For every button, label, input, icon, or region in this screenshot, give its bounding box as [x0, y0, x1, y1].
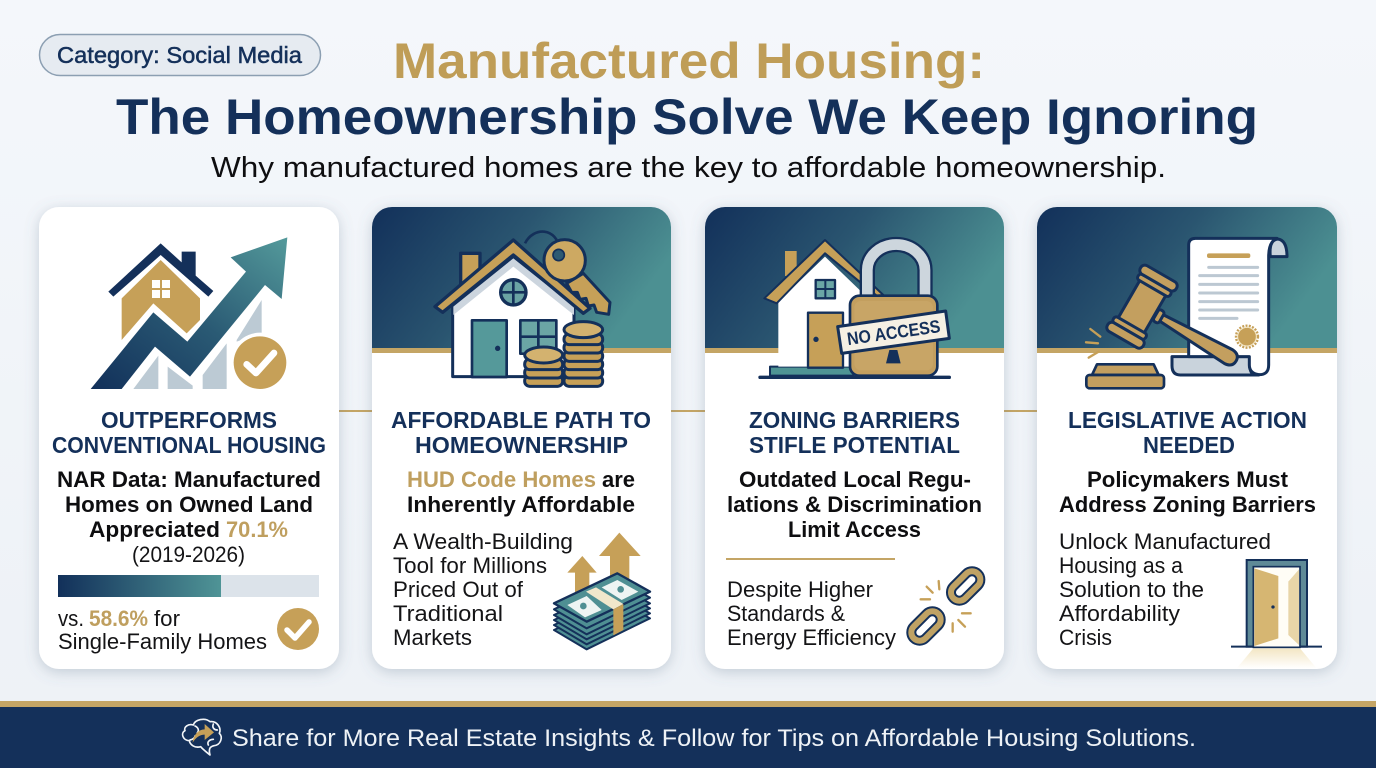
heading [749, 407, 960, 458]
subheading: are [602, 467, 635, 492]
heading: STIFLE POTENTIAL [749, 432, 960, 458]
body text: Traditional [393, 601, 503, 626]
panel: zoning barriers [705, 207, 1004, 669]
icon: broken chain [908, 568, 984, 644]
heading: LEGISLATIVE ACTION [1068, 407, 1307, 433]
panel: affordable path [372, 207, 671, 669]
body text: Solution to the [1059, 577, 1204, 602]
icon: house with key and coins [435, 232, 610, 386]
subheading: Outdated Local Regu- [739, 467, 971, 492]
comparison text: vs. [58, 606, 84, 631]
heading [1068, 407, 1307, 458]
icon: house with padlock and no access sign [760, 240, 949, 377]
icon: house with padlock and no access sign: NO ACCESS [846, 316, 942, 349]
heading: OUTPERFORMS [101, 407, 277, 433]
heading: NEEDED [1143, 432, 1235, 458]
body statistic: Homes on Owned Land [65, 492, 313, 517]
panel: outperforms conventional housing [39, 207, 339, 669]
subheading [407, 467, 635, 517]
body text: Energy Efficiency [727, 625, 896, 650]
heading [52, 407, 326, 458]
body text [727, 577, 896, 650]
category pill [40, 34, 320, 76]
icon: money stack with arrows [554, 533, 650, 649]
card background 3 [705, 207, 1004, 669]
heading: AFFORDABLE PATH TO [391, 407, 651, 433]
icon: gavel and legal document [1086, 238, 1287, 394]
card background 2 [372, 207, 671, 669]
connector lines between cards [339, 410, 1037, 412]
subheading [1059, 467, 1316, 517]
subheading: HUD Code Homes [407, 467, 596, 492]
body text [393, 529, 573, 650]
icon: check badge [277, 608, 319, 650]
body text: Crisis [1059, 625, 1112, 650]
subheading: lations & Discrimination [727, 492, 982, 517]
body text: Tool for Millions [393, 553, 547, 578]
title: Manufactured Housing: [393, 33, 985, 89]
title [116, 33, 1258, 145]
body text [1059, 529, 1271, 650]
body text: Markets [393, 625, 472, 650]
category pill: Category: Social Media [57, 42, 302, 68]
body text: Housing as a [1059, 553, 1184, 578]
body text: Affordability [1059, 601, 1180, 626]
progress bar [58, 575, 319, 597]
heading [391, 407, 651, 458]
body text: Unlock Manufactured [1059, 529, 1271, 554]
icon: house with rising arrow [91, 237, 290, 393]
footer banner [0, 701, 1376, 768]
comparison text: Single-Family Homes [58, 629, 267, 654]
title: The Homeownership Solve We Keep Ignoring [116, 89, 1258, 145]
subtitle: Why manufactured homes are the key to affordable homeownership. [211, 152, 1166, 184]
comparison text: 58.6% [89, 606, 148, 631]
body statistic: Appreciated [89, 517, 220, 542]
card background 4 [1037, 207, 1337, 669]
call to action: Share for More Real Estate Insights & Follow for Tips on Affordable Housing Solutions. [232, 725, 1196, 752]
body statistic: NAR Data: Manufactured [57, 467, 321, 492]
heading: ZONING BARRIERS [749, 407, 960, 433]
icon: open door [1231, 560, 1322, 668]
body text: Priced Out of [393, 577, 524, 602]
comparison text [58, 606, 267, 654]
body statistic [57, 467, 321, 567]
panel: legislative action [1037, 207, 1337, 669]
heading: HOMEOWNERSHIP [415, 432, 628, 458]
body statistic: (2019-2026) [132, 542, 245, 567]
body text: Standards & [727, 601, 845, 626]
icon: brain with arrow [183, 719, 221, 755]
subheading [727, 467, 982, 542]
heading: CONVENTIONAL HOUSING [52, 432, 326, 458]
subheading: Inherently Affordable [407, 492, 635, 517]
subheading: Address Zoning Barriers [1059, 492, 1316, 517]
subheading: Limit Access [788, 517, 921, 542]
comparison text: for [154, 606, 180, 631]
subheading: Policymakers Must [1087, 467, 1288, 492]
body statistic: 70.1% [226, 517, 288, 542]
card background 1 [39, 207, 339, 669]
body text: Despite Higher [727, 577, 873, 602]
body text: A Wealth-Building [393, 529, 573, 554]
